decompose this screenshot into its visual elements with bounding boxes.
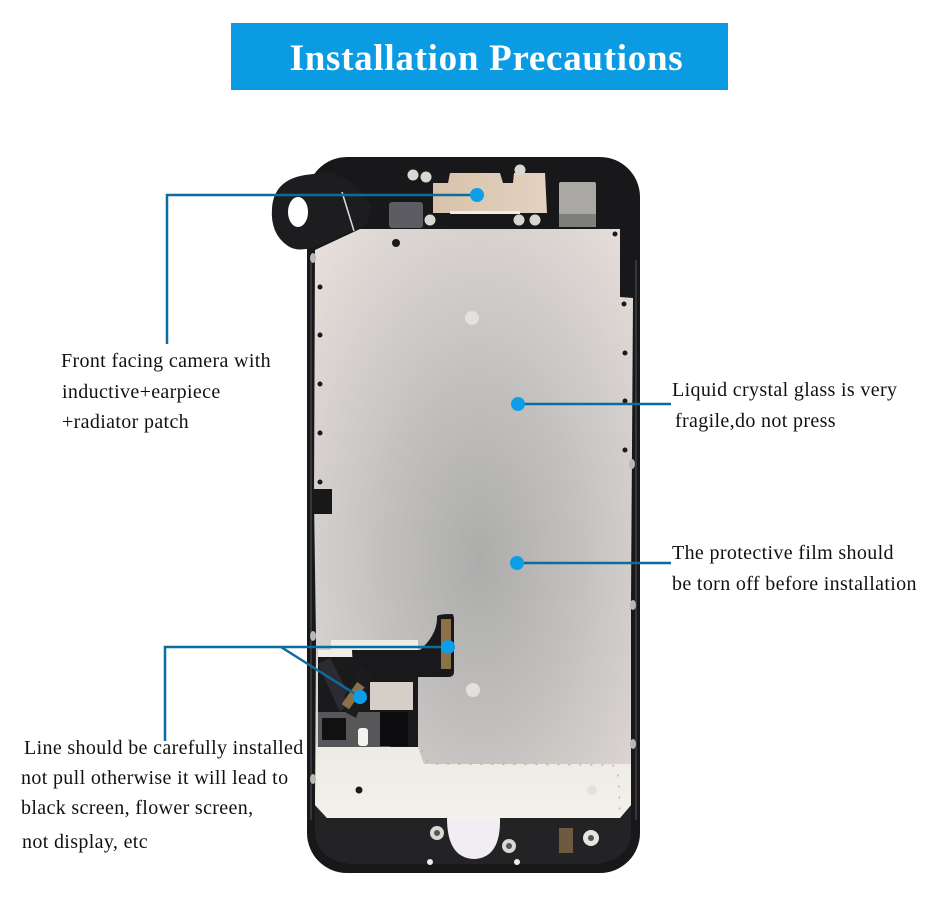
label: protective film: be torn off before installation (672, 573, 917, 595)
home button opening (447, 818, 500, 859)
plate embossed circles (465, 311, 597, 795)
label: line installation: not pull otherwise it will lead to (21, 767, 288, 789)
bottom brackets and screws (427, 826, 599, 865)
label: line installation: black screen, flower screen, (21, 797, 253, 819)
side screws (310, 253, 636, 784)
label: liquid crystal glass (672, 379, 897, 432)
label: front camera: +radiator patch (62, 411, 189, 433)
label: front camera: inductive+earpiece (62, 381, 221, 403)
label: front camera (61, 350, 271, 433)
label: front camera: Front facing camera with (61, 350, 271, 372)
lower plate dotted seam (422, 750, 620, 815)
earpiece radiator patch (408, 164, 547, 226)
callout dots (353, 188, 525, 704)
flex cable with connectors (342, 614, 454, 718)
camera flex cable (272, 172, 423, 250)
lower metal plate section (315, 747, 631, 818)
label: protective film: The protective film should (672, 542, 894, 564)
title banner (231, 23, 728, 90)
title banner: Installation Precautions (290, 38, 683, 79)
plate holes (318, 232, 628, 794)
phone frame (307, 157, 640, 873)
side tab (314, 489, 332, 514)
left connector cut-out (318, 657, 418, 747)
text: not display, etc (22, 831, 148, 853)
white plate strip above flex (318, 640, 418, 657)
label: liquid crystal glass: Liquid crystal glass is very (672, 379, 897, 401)
main metal shield plate (314, 229, 633, 818)
callout lines (165, 195, 671, 741)
label: protective film (672, 542, 917, 595)
label: line installation (21, 737, 304, 853)
speaker mesh patch (559, 182, 596, 227)
label: line installation: Line should be carefully installed (24, 737, 304, 759)
label: liquid crystal glass: fragile,do not press (675, 410, 836, 432)
